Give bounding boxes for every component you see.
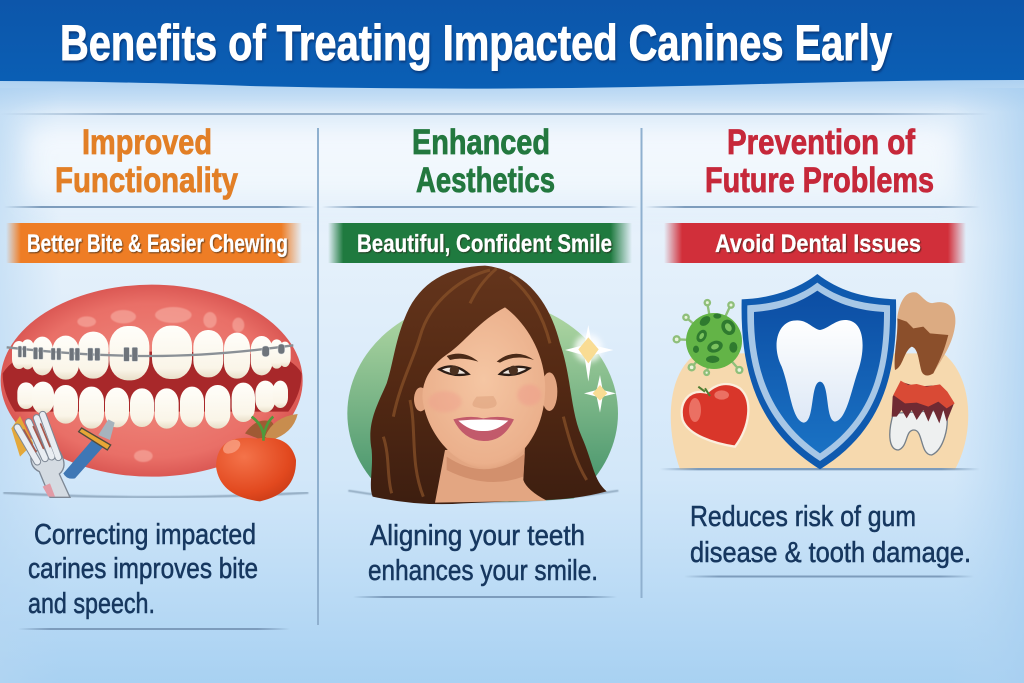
upper teeth — [12, 326, 291, 380]
eyebrows — [447, 354, 478, 362]
ribbon: confident smile — [328, 223, 632, 263]
ribbon: avoid dental issues — [664, 223, 966, 263]
tooth emblem — [777, 320, 863, 423]
heading: improved functionality: Functionality — [55, 161, 238, 200]
smile — [453, 417, 514, 441]
ears — [414, 387, 427, 411]
nose — [472, 396, 497, 409]
icon: apple — [216, 414, 298, 501]
header banner — [0, 0, 1024, 89]
illustration: protection shield — [660, 274, 980, 470]
hair — [370, 266, 607, 504]
illustration: teeth with braces — [1, 285, 308, 501]
description: improved functionality: carines improves bite — [28, 553, 258, 585]
illustration: smiling woman — [347, 266, 618, 528]
icon: shield — [742, 274, 896, 469]
icon: toothbrush — [63, 419, 115, 479]
eyes — [439, 366, 468, 375]
heading: enhanced aesthetics: Aesthetics — [416, 161, 555, 200]
lower teeth — [17, 381, 288, 429]
gum highlights — [77, 307, 244, 462]
description: improved functionality — [28, 519, 258, 620]
sand backdrop — [671, 353, 968, 469]
face — [422, 307, 545, 468]
dividers and rules — [0, 113, 990, 630]
heading: prevention of future problems — [705, 123, 934, 200]
heading: enhanced aesthetics — [412, 123, 555, 200]
icon: decayed brown tooth — [895, 292, 955, 375]
description: prevention: disease & tooth damage. — [690, 537, 971, 569]
icon: virus — [674, 300, 742, 375]
neck and chest — [435, 447, 547, 503]
green circle — [347, 313, 618, 502]
description: improved functionality: and speech. — [28, 588, 155, 620]
column: enhanced aesthetics — [328, 123, 632, 587]
description: enhanced aesthetics: enhances your smile. — [368, 555, 598, 587]
description: improved functionality: Correcting impacted — [34, 519, 256, 551]
description: enhanced aesthetics: Aligning your teeth — [370, 520, 585, 552]
ribbon: avoid dental issues: Avoid Dental Issues — [715, 230, 921, 258]
description: enhanced aesthetics — [368, 520, 598, 587]
icon: tooth with gum disease — [890, 381, 955, 455]
ribbon: better bite: Better Bite & Easier Chewing — [27, 230, 288, 258]
gums — [1, 285, 303, 477]
icon: fork — [11, 415, 70, 497]
icon: heart apple — [682, 384, 748, 447]
ribbon: better bite — [6, 223, 302, 263]
heading: prevention of future problems: Prevention of — [727, 123, 915, 162]
column: improved functionality — [1, 123, 308, 620]
column: prevention of future problems — [660, 123, 980, 569]
heading: enhanced aesthetics: Enhanced — [412, 123, 550, 162]
braces — [7, 344, 293, 361]
description: prevention — [690, 501, 971, 569]
heading: prevention of future problems: Future Problems — [705, 161, 934, 200]
heading: improved functionality — [55, 123, 238, 200]
description: prevention: Reduces risk of gum — [690, 501, 916, 533]
heading: improved functionality: Improved — [82, 123, 212, 162]
ribbon: confident smile: Beautiful, Confident Smile — [357, 230, 612, 258]
sparkles — [565, 325, 616, 413]
